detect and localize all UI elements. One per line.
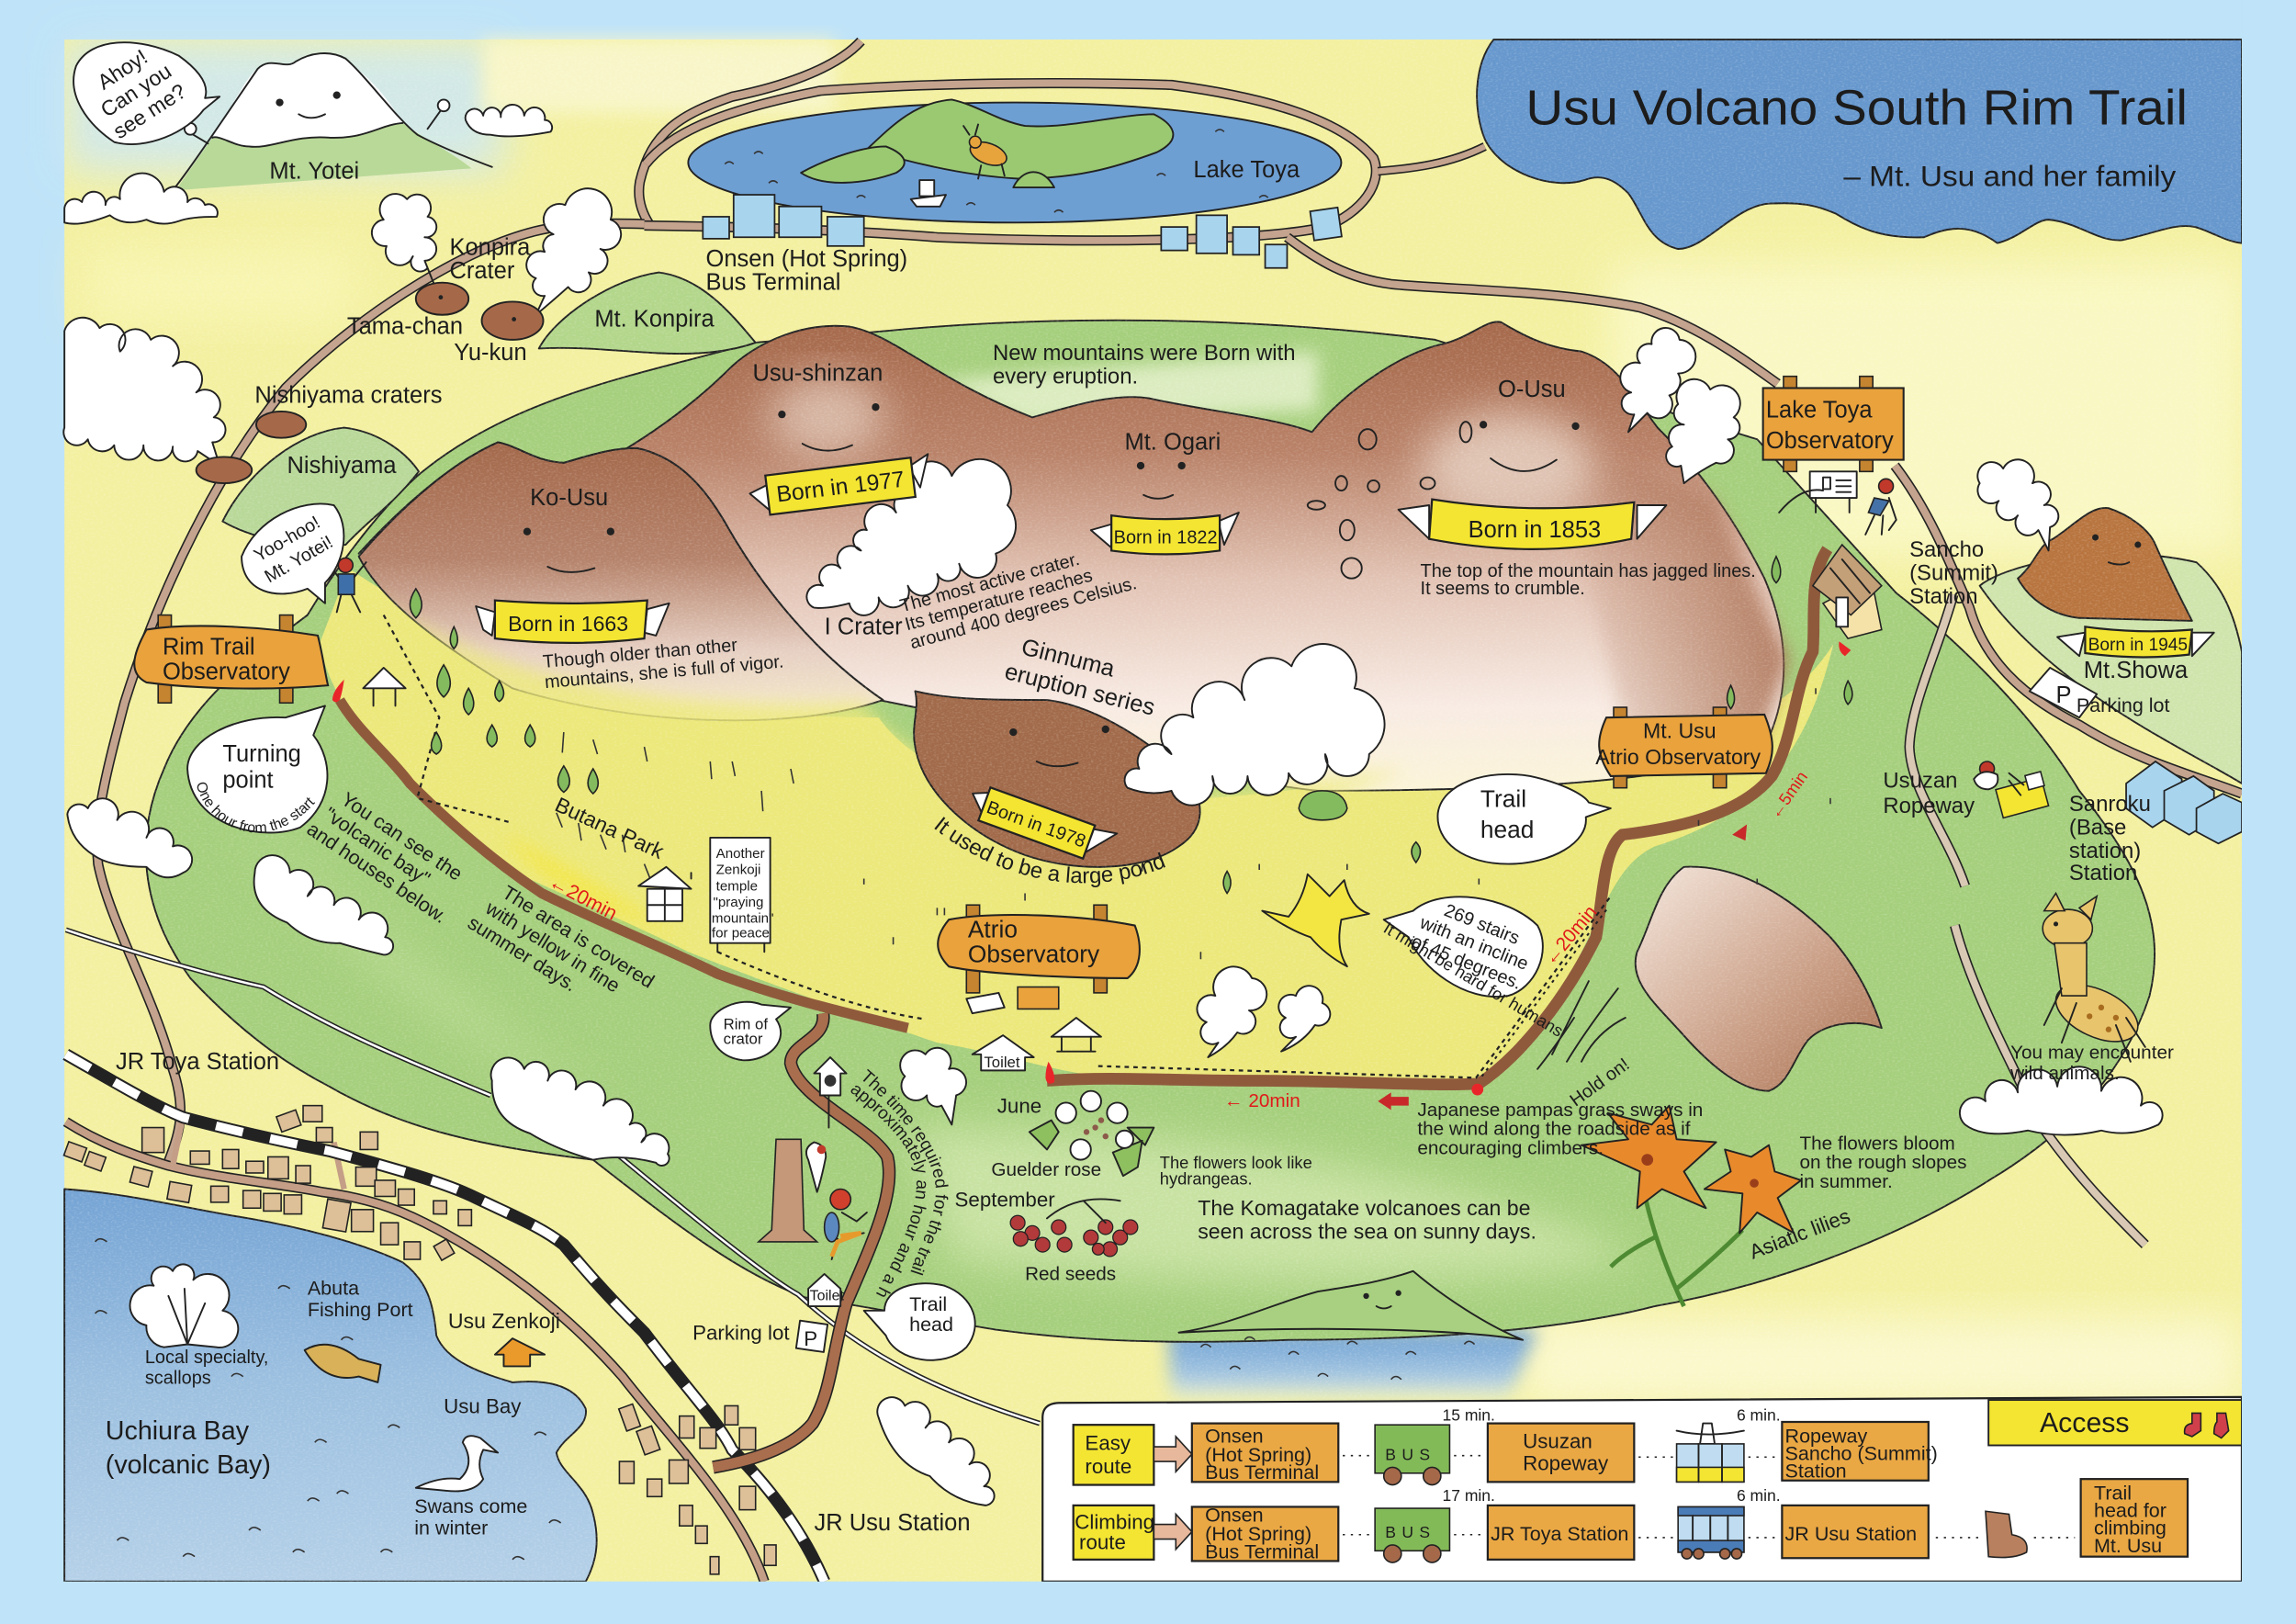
railway line — [66, 1054, 825, 1582]
craters: Konpira and Nishiyama — [177, 283, 544, 540]
icon: Butana Park pavilion — [638, 867, 692, 921]
label: flowers — [955, 1095, 1536, 1284]
icon: summit hiker — [1865, 479, 1896, 535]
mountain ridge line: Ko-Usu right side — [359, 442, 883, 700]
label: title: Usu Volcano South Rim Trail — [1525, 81, 2188, 136]
icon: Zenkoji sign board: for peace — [712, 925, 770, 941]
label: flowers: The flowers look like — [1160, 1153, 1312, 1172]
banner: Born in 1853: Born in 1853 — [1469, 517, 1601, 543]
hill: lower brown ridge — [1636, 867, 1882, 1091]
sign: Lake Toya Observatory: Lake Toya — [1766, 397, 1873, 423]
icon: red marker Atrio — [1045, 1062, 1054, 1084]
labels: east side: (Summit) — [1909, 560, 1998, 585]
region: back mountains mass — [623, 321, 1784, 791]
banner: Born in 1978: Born in 1978 — [984, 797, 1088, 851]
labels: mountains — [530, 341, 1756, 639]
speech bubble: Ahoy: Ahoy! — [93, 45, 152, 95]
labels: Ko-Usu note: Though older than other — [542, 635, 738, 672]
label: flowers: September — [955, 1189, 1055, 1212]
labels: east side: You may encounter — [2010, 1043, 2174, 1064]
region: Komagatake sea — [1168, 1330, 1537, 1398]
border strip: right — [2242, 0, 2296, 1624]
label: time required note: approximately an hour and a half — [850, 1086, 927, 1297]
access row: Climbing route: Climbing — [1075, 1510, 1154, 1533]
labels: slope notes: You can see the — [337, 788, 467, 885]
labels: southwest: Abuta — [308, 1277, 359, 1299]
labels: southwest: in winter — [414, 1517, 488, 1539]
labels: Ko-Usu note — [542, 631, 784, 693]
labels: yellow note: summer days. — [464, 912, 580, 996]
speech bubble: Turning point — [186, 705, 329, 834]
banner: Born in 1663 — [476, 601, 670, 643]
labels: southwest: Fishing Port — [308, 1299, 413, 1321]
region: pale centre of O-Usu — [1421, 413, 1596, 524]
sign: Mt. Usu Atrio Observatory — [1595, 707, 1773, 788]
panel: access — [1042, 1397, 2242, 1582]
labels: crater note: Its temperature reaches — [903, 566, 1095, 635]
speech bubble: Ahoy: see me? — [108, 79, 190, 143]
labels: Ko-Usu note: mountains, she is full of vigor. — [544, 652, 784, 693]
icon: red marker rim — [332, 680, 344, 702]
cloud: small near Mt. Yotei — [466, 105, 552, 136]
speech bubble: Ahoy — [73, 37, 219, 144]
access row: Climbing route: BUS — [1385, 1523, 1435, 1541]
road: Usuzan ropeway approach — [1909, 594, 2145, 1245]
banner: Born in 1822 — [1091, 513, 1239, 554]
speech bubble: Rim of crator: Rim of — [724, 1016, 768, 1033]
labels: southwest: Swans come — [414, 1495, 527, 1517]
labels: north area: Konpira — [449, 234, 531, 260]
label: Asiatic lilies: Asiatic lilies — [1746, 1204, 1853, 1264]
lake: Lake Toya — [688, 103, 1341, 222]
cloud: Usu-shinzan I Crater steam — [806, 459, 1016, 615]
speech bubble: Trail head bottom: Trail — [909, 1293, 947, 1315]
cloud: Ginnuma steam — [1125, 644, 1385, 806]
speech bubble: Ahoy: Can you — [96, 59, 175, 122]
access row: Easy route: Bus Terminal — [1205, 1461, 1319, 1483]
region: brown edge shading on O-Usu — [1552, 439, 1789, 754]
label: lilies note: in summer. — [1800, 1171, 1893, 1192]
labels: crater note — [898, 536, 1139, 653]
icon: Komagatake mountain — [1178, 1271, 1523, 1340]
access row: Easy route: BUS — [1385, 1445, 1435, 1463]
sign: Lake Toya Observatory — [1763, 377, 1904, 471]
trail: rim trail — [340, 549, 1828, 1085]
sign: Atrio Observatory: Observatory — [968, 940, 1100, 967]
banner: Born in 1977 — [748, 454, 933, 517]
access row: Easy route: Onsen — [1205, 1425, 1264, 1447]
access row: Easy route: Station — [1785, 1460, 1847, 1483]
label: large pond: It used to be a large pond — [934, 817, 1165, 887]
icon: rim trail shelter — [363, 668, 406, 705]
label: might be hard: It might be hard for humans — [1380, 918, 1567, 1041]
labels: mountains: I Crater — [825, 614, 903, 639]
labels: Ginnuma eruption series: eruption series — [1002, 659, 1157, 721]
trail: climbing route — [713, 1013, 889, 1467]
icon: climbing hiker — [825, 1190, 867, 1259]
icon: Asiatic lilies — [1581, 1106, 1801, 1306]
labels: southwest: Usu Bay — [444, 1394, 522, 1417]
cloud: O-Usu steam left — [1620, 328, 1695, 432]
icon: Zenkoji sign board: "praying — [713, 895, 763, 910]
road: coast road — [66, 1116, 764, 1582]
access row: Easy route: Usuzan — [1523, 1430, 1593, 1453]
region: Uchiura Bay water — [64, 1190, 597, 1582]
label: pampas grass: encouraging climbers. — [1417, 1137, 1604, 1158]
access banner: Access — [2040, 1408, 2130, 1438]
labels: east side: Parking lot — [2077, 694, 2170, 716]
labels: Ginnuma eruption series: Ginnuma — [1019, 634, 1118, 682]
banner: Born in 1945 — [2057, 626, 2214, 657]
access row: Easy route: (Hot Spring) — [1205, 1444, 1311, 1466]
access row: Climbing route: Trail — [2094, 1482, 2132, 1504]
road: white double road — [66, 930, 1040, 1424]
labels: east side: Station — [1909, 584, 1978, 609]
speech bubble: Rim of crator: crator — [724, 1031, 763, 1048]
labels: north area: Crater — [449, 258, 515, 284]
speech bubble: Turning point: Turning — [222, 741, 301, 767]
label: pampas grass: Japanese pampas grass sways in — [1417, 1100, 1703, 1121]
labels: mountains: The top of the mountain has jagged lines. — [1421, 561, 1756, 581]
road: east road to Lake Toya Observatory and Sanroku — [1287, 237, 2242, 794]
labels: east side: Sanroku — [2069, 792, 2151, 817]
labels: north area — [254, 157, 1300, 479]
labels: north area: Nishiyama — [287, 453, 397, 479]
trees on Ko-Usu slope — [410, 557, 1852, 893]
region: green rim slopes — [146, 321, 2155, 1342]
hill: Mt. Showa base — [1980, 554, 2242, 784]
labels: east side: Ropeway — [1883, 794, 1975, 818]
labels: slope notes: "volcanic bay" — [320, 803, 434, 890]
icon: deer — [2043, 893, 2146, 1062]
labels: southwest: JR Usu Station — [814, 1510, 971, 1536]
labels: mountains: New mountains were Born with — [993, 341, 1296, 366]
speech bubble: Yoo-hoo — [242, 503, 343, 603]
label: red time 20min Butana: ←20min — [546, 871, 621, 925]
labels: north area: Bus Terminal — [705, 270, 840, 296]
label: lilies note — [1800, 1133, 1967, 1192]
rocks on O-Usu — [1308, 422, 1471, 579]
banner: Born in 1977: Born in 1977 — [775, 468, 906, 508]
labels: Ginnuma eruption series — [1002, 632, 1165, 721]
speech bubble: Trail head bottom — [864, 1283, 975, 1360]
access row: Climbing route: Bus Terminal — [1205, 1540, 1319, 1562]
mountain: Ginnuma mound — [914, 691, 1200, 867]
labels: southwest: Uchiura Bay — [106, 1416, 250, 1446]
label: flowers: The Komagatake volcanoes can be — [1198, 1196, 1531, 1220]
labels: slope notes — [303, 782, 476, 928]
icon: fish — [305, 1345, 381, 1382]
icon: Trail signpost — [814, 1057, 847, 1128]
labels: southwest — [106, 1049, 971, 1539]
houses: along the coast — [64, 1106, 776, 1574]
labels: yellow note: with yellow in fine — [481, 897, 624, 998]
region: upper pale valley between mountains — [937, 352, 1318, 424]
labels: east side: station) — [2069, 839, 2141, 863]
icon: Sancho station building — [1813, 545, 1882, 638]
label: red time 5min: ←5min — [1765, 767, 1811, 822]
label: Hold on: Hold on! — [1567, 1054, 1633, 1111]
banner: Born in 1663: Born in 1663 — [508, 612, 628, 636]
label: title — [1525, 81, 2188, 192]
sign: Mt. Usu Atrio Observatory: Atrio Observatory — [1595, 745, 1761, 769]
icon: red marker stairs foot — [1471, 1084, 1483, 1095]
labels: east side: Usuzan — [1883, 769, 1957, 794]
label: lilies note: on the rough slopes — [1800, 1152, 1967, 1173]
speech bubble: Yoo-hoo: Yoo-hoo! — [251, 513, 323, 566]
mountain: Ko-Usu — [359, 442, 883, 720]
label: flowers: seen across the sea on sunny days. — [1198, 1220, 1536, 1244]
access row: Easy route: 15 min. — [1442, 1405, 1495, 1424]
cloud: June meadow — [900, 1048, 966, 1124]
access row: Easy route: 6 min. — [1737, 1405, 1781, 1424]
labels: east side: (Base — [2069, 816, 2126, 840]
banner: Born in 1853 — [1399, 500, 1666, 549]
icon: woodpecker tree — [759, 1139, 826, 1242]
sign: Atrio Observatory — [938, 905, 1140, 993]
cloud: Tama-chan steam — [372, 194, 436, 290]
buildings: Onsen town — [703, 195, 1342, 268]
access row: Climbing route: route — [1079, 1531, 1126, 1554]
icon: scallop — [130, 1264, 238, 1348]
labels: southwest: JR Toya Station — [116, 1049, 279, 1075]
labels: east side: Mt.Showa — [2084, 658, 2189, 683]
icon: Usu Zenkoji temple — [495, 1338, 545, 1366]
road: fork to sea — [1378, 146, 1485, 172]
border strip: bottom — [0, 1582, 2296, 1624]
icon: ferry boat — [911, 180, 946, 207]
access row: Easy route: Sancho (Summit) — [1785, 1442, 1938, 1464]
labels: mountains: Usu-shinzan — [753, 361, 883, 386]
banner: Born in 1978 — [964, 783, 1117, 866]
cloud: green slope centre — [491, 1058, 670, 1166]
labels: southwest: Local specialty, — [145, 1348, 268, 1368]
lake: top right title water — [1477, 39, 2242, 249]
labels: east side — [1883, 537, 2189, 1084]
labels: east side: Station — [2069, 861, 2137, 885]
speech bubble: Trail head bottom: head — [909, 1314, 953, 1336]
sign: Lake Toya Observatory: Observatory — [1766, 428, 1894, 454]
speech bubble: 269 stairs: 269 stairs — [1441, 900, 1523, 949]
labels: mountains: It seems to crumble. — [1421, 579, 1585, 599]
labels: north area: Nishiyama craters — [254, 382, 442, 408]
labels: east side: Sancho — [1909, 537, 1984, 562]
label: time required note — [850, 1069, 949, 1297]
access banner — [1988, 1400, 2242, 1446]
icon: red marker summit — [1839, 641, 1851, 656]
stairs rail — [1482, 908, 1608, 1077]
label: red time 20min stairs: ←20min — [1539, 902, 1601, 969]
region: pale patch on green slope — [234, 820, 1640, 1281]
labels: mountains: every eruption. — [993, 365, 1138, 389]
label: red time 20min Atrio: ← 20min — [1224, 1090, 1300, 1111]
labels: north area: Tama-chan — [347, 313, 463, 339]
speech bubble: 269 stairs — [1384, 894, 1543, 997]
icon: Trailhead toilet: Toilet — [810, 1289, 844, 1304]
label: flowers: June — [997, 1095, 1041, 1118]
speech bubble: Rim of crator — [710, 1002, 791, 1060]
icon: Toilet buildings at Atrio — [966, 987, 1101, 1071]
label: title: – Mt. Usu and her family — [1843, 159, 2176, 192]
label: time required note: The time required for the trail is — [863, 1069, 949, 1275]
cloud: bottom near JR Usu — [877, 1397, 995, 1506]
label: pampas grass — [1417, 1100, 1703, 1158]
labels: yellow note — [464, 874, 658, 1030]
labels: southwest: scallops — [145, 1369, 211, 1389]
road: Lake Toya loop — [645, 84, 1376, 241]
cloud: O-Usu steam right — [1666, 379, 1740, 483]
labels: north area: Yu-kun — [454, 340, 527, 366]
icon: Zenkoji sign board — [710, 838, 773, 952]
access row: Easy route: route — [1085, 1455, 1131, 1478]
icon: swan — [416, 1436, 498, 1491]
speech bubble: Trail head top — [1437, 774, 1611, 864]
sign: Rim Trail Observatory — [134, 615, 328, 703]
speech bubble: 269 stairs: with an incline — [1416, 912, 1531, 975]
labels: north area: Lake Toya — [1193, 157, 1300, 183]
icon: rim lookout hiker — [328, 558, 366, 612]
banner: Born in 1822: Born in 1822 — [1114, 527, 1218, 547]
sign: Atrio Observatory: Atrio — [968, 915, 1018, 942]
hill: Nishiyama — [222, 428, 419, 545]
road: west road — [97, 223, 645, 1166]
faces on mountains — [439, 295, 2141, 766]
region: pale centre of Usu-shinzan — [769, 377, 886, 458]
buildings: Sanroku station — [2126, 761, 2242, 843]
labels: southwest: Usu Zenkoji — [448, 1309, 560, 1333]
access row: Climbing route: climbing — [2094, 1517, 2167, 1539]
access row: Easy route: Easy — [1085, 1431, 1131, 1454]
speech bubble: Trail head top: head — [1480, 816, 1534, 843]
access row: Climbing route: JR Toya Station — [1491, 1523, 1628, 1545]
labels: crater note: The most active crater. — [898, 549, 1082, 616]
access row: Easy route: Ropeway — [1785, 1425, 1868, 1447]
labels: east side: P — [2056, 682, 2072, 708]
cloud: green slope left — [254, 855, 393, 954]
label: lilies note: The flowers bloom — [1800, 1133, 1955, 1154]
access row: Easy route — [1074, 1405, 1938, 1485]
icon: Toilet buildings at Atrio: Toilet — [984, 1054, 1020, 1071]
sign: Mt. Usu Atrio Observatory: Mt. Usu — [1643, 718, 1716, 742]
labels: southwest: Parking lot — [692, 1322, 790, 1345]
parking lot signs — [796, 668, 2097, 1352]
sign: Rim Trail Observatory: Observatory — [163, 660, 290, 685]
labels: mountains: Mt. Ogari — [1124, 429, 1221, 455]
speech bubble: Turning point: point — [222, 768, 274, 794]
access row: Climbing route: Onsen — [1205, 1504, 1264, 1526]
access row: Climbing route: JR Usu Station — [1785, 1523, 1917, 1545]
icon: deer on island — [963, 125, 1010, 178]
labels: Butana park: Butana Park — [552, 793, 668, 863]
access row: Climbing route: Mt. Usu — [2094, 1535, 2162, 1557]
cloud: left slope small — [67, 798, 192, 877]
region: yellow inner crater slopes — [320, 569, 1833, 1087]
cloud: under Mt. Yotei — [64, 174, 218, 224]
labels: north area: Onsen (Hot Spring) — [705, 246, 907, 272]
access row: Climbing route: (Hot Spring) — [1205, 1523, 1311, 1545]
labels: north area: Mt. Konpira — [594, 307, 715, 333]
speech bubble: Turning point: One hour from the start — [197, 783, 315, 832]
icon: Zenkoji sign board: Another — [716, 846, 765, 862]
labels: north area: Mt. Yotei — [269, 158, 359, 184]
road: north road to bus terminal — [639, 41, 861, 226]
icon: Zenkoji sign board: temple — [716, 878, 758, 894]
labels: southwest: P — [804, 1327, 817, 1350]
icon: ropeway gondola — [1974, 761, 2049, 818]
label: flowers: Guelder rose — [991, 1159, 1101, 1180]
speech bubble: 269 stairs: of 45 degrees. — [1409, 931, 1525, 994]
labels: mountains: O-Usu — [1498, 377, 1566, 402]
label: pampas grass: the wind along the roadside as if — [1417, 1119, 1691, 1140]
mountain: Mt. Showa mound — [2018, 508, 2192, 621]
labels: slope notes: and houses below. — [303, 818, 451, 928]
pond marks around pampas — [1537, 981, 1626, 1069]
mountain: Mt. Yotei — [173, 53, 492, 190]
mask: crater yellow fade — [359, 586, 1406, 855]
cloud: Yu-kun steam — [526, 188, 621, 315]
access row: Climbing route: 6 min. — [1737, 1486, 1781, 1505]
icon: Guelder rose — [1030, 1091, 1154, 1176]
region: Butana Park bright yellow — [505, 835, 688, 944]
icon: lookout board — [1779, 471, 1857, 513]
trail-side grass tufts — [557, 688, 1830, 959]
speech bubble: Trail head top: Trail — [1480, 784, 1526, 812]
hill: Mt. Konpira — [539, 273, 756, 354]
sign: Rim Trail Observatory: Rim Trail — [163, 635, 255, 660]
label: flowers: Red seeds — [1025, 1263, 1116, 1284]
labels: crater note: around 400 degrees Celsius. — [907, 573, 1139, 653]
icon: yellow bird — [1262, 874, 1369, 966]
icon: Trailhead toilet — [808, 1274, 844, 1306]
access row: Climbing route: head for — [2094, 1500, 2167, 1522]
label: flowers: hydrangeas. — [1160, 1169, 1253, 1189]
banner: Born in 1945: Born in 1945 — [2088, 636, 2188, 655]
labels: yellow note: The area is covered — [499, 882, 658, 993]
icon: Zenkoji sign board: Zenkoji — [716, 863, 760, 878]
icon: red seeds — [1010, 1199, 1138, 1257]
island: Nakajima — [801, 99, 1173, 187]
waves in lakes and seas — [96, 130, 1475, 1560]
steam: Atrio left and right plumes — [1197, 966, 1330, 1057]
access row: Easy route: Ropeway — [1523, 1452, 1609, 1475]
speech bubble: Yoo-hoo: Mt. Yotei! — [261, 532, 336, 587]
access row: Climbing route: 17 min. — [1442, 1486, 1495, 1505]
cloud: right meadow — [1960, 1066, 2163, 1135]
cloud: Nishiyama craters steam — [63, 318, 226, 466]
access row: Climbing route — [1074, 1479, 2188, 1562]
labels: east side: wild animals. — [2009, 1063, 2120, 1084]
labels: southwest: (volcanic Bay) — [106, 1450, 271, 1480]
labels: mountains: Ko-Usu — [530, 485, 608, 511]
arrows: red direction — [1378, 825, 1747, 1110]
cloud: Mt. Showa steam — [1977, 459, 2058, 550]
icon: Zenkoji sign board: mountain" — [712, 910, 773, 926]
